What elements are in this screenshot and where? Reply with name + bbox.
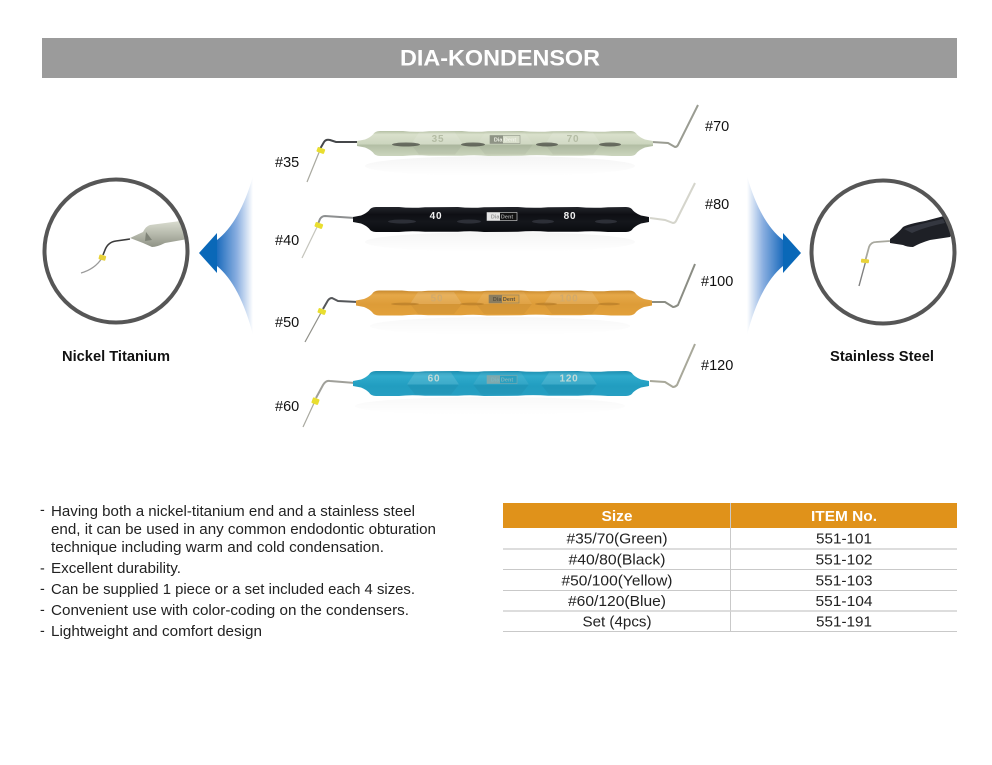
feature list: -	[40, 561, 45, 577]
feature list: end, it can be used in any common endodontic obturation	[51, 522, 436, 538]
instrument: black 40/80: 80	[564, 211, 576, 222]
table rows: 551-103	[816, 574, 873, 590]
label: Stainless Steel: Stainless Steel	[830, 349, 934, 365]
table rows: Set (4pcs)	[582, 614, 652, 630]
instrument: orange 50/100	[305, 264, 695, 342]
label: #70: #70	[705, 119, 729, 135]
feature list: -	[40, 582, 45, 598]
table rows: 551-102	[816, 552, 873, 568]
panel: nickel titanium detail	[44, 180, 188, 365]
instrument: orange 50/100: Dia Dent	[493, 297, 515, 303]
instrument: green 35/70: Dia Dent	[494, 138, 516, 144]
table header	[503, 503, 957, 528]
table rows: 551-101	[816, 532, 872, 548]
label: #35: #35	[275, 155, 299, 171]
table header: Size	[602, 509, 632, 525]
label: #50: #50	[275, 315, 299, 331]
table rows: #40/80(Black)	[568, 552, 666, 568]
instrument: green 35/70: 70	[567, 134, 579, 145]
feature list	[40, 502, 436, 640]
feature list: technique including warm and cold condensation.	[51, 540, 384, 556]
instrument: blue 60/120	[303, 344, 695, 427]
instrument: blue 60/120: Dia Dent	[491, 378, 513, 384]
title bar: DIA-KONDENSOR	[400, 46, 600, 70]
instrument: orange 50/100: 100	[559, 294, 579, 304]
label: #60: #60	[275, 399, 299, 415]
instrument: black 40/80: 40	[430, 211, 442, 222]
label: #40: #40	[275, 233, 299, 249]
table rows: #60/120(Blue)	[568, 594, 666, 610]
arrow: pointing right to stainless steel	[747, 176, 801, 335]
table header: ITEM No.	[811, 509, 877, 525]
label: #120: #120	[701, 358, 733, 374]
feature list: -	[40, 602, 45, 618]
instrument: black 40/80: Dia Dent	[491, 215, 513, 221]
table rows: 551-104	[816, 594, 873, 610]
icon: nickel titanium close-up circle	[44, 180, 188, 322]
title bar	[42, 38, 957, 78]
panel: stainless steel detail	[812, 180, 955, 365]
feature list: Lightweight and comfort design	[51, 624, 262, 640]
feature list: Can be supplied 1 piece or a set included each 4 sizes.	[51, 582, 415, 598]
table rows: 551-191	[816, 614, 872, 630]
instrument: green 35/70	[307, 105, 698, 182]
label: #100: #100	[701, 274, 733, 290]
instrument: green 35/70: 35	[432, 134, 444, 145]
feature list: Having both a nickel-titanium end and a stainless steel	[51, 504, 415, 520]
table rows	[562, 532, 873, 630]
instrument: blue 60/120: 120	[559, 374, 579, 384]
feature list: -	[40, 502, 45, 518]
instrument: blue 60/120: 60	[428, 374, 440, 384]
instrument: black 40/80	[302, 183, 695, 258]
table rows: #50/100(Yellow)	[562, 574, 672, 590]
feature list: Convenient use with color-coding on the condensers.	[51, 603, 409, 619]
feature list: -	[40, 624, 45, 640]
label: Nickel Titanium: Nickel Titanium	[62, 349, 170, 365]
arrow: pointing left to nickel titanium	[199, 176, 253, 335]
icon: stainless steel close-up circle	[812, 180, 955, 324]
instrument: orange 50/100: 50	[431, 294, 443, 304]
feature list: Excellent durability.	[51, 561, 181, 577]
label: #80: #80	[705, 197, 729, 213]
table: size and item number	[503, 503, 957, 632]
table rows: #35/70(Green)	[566, 532, 668, 548]
